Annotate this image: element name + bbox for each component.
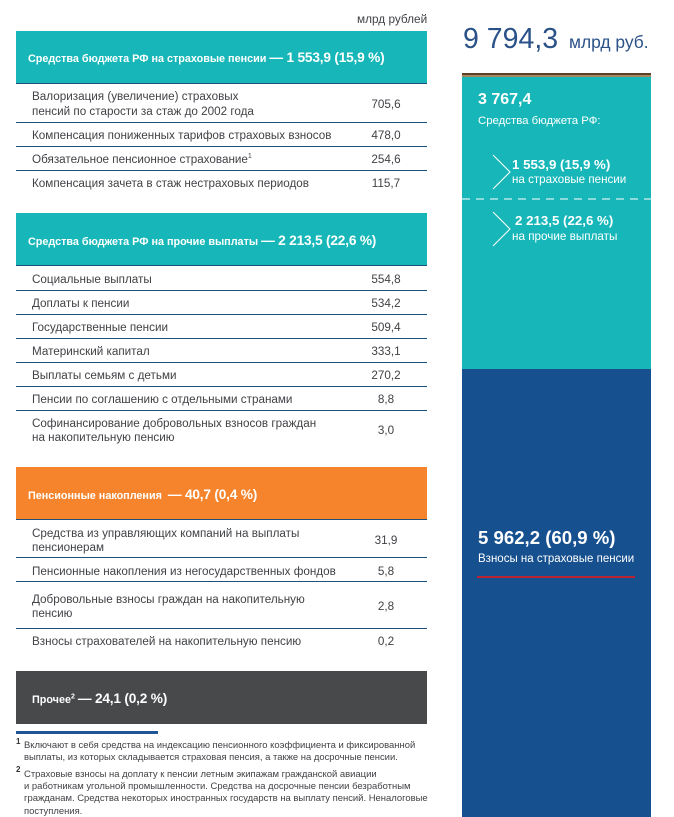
value: non-state funds: 5,8 [378,565,394,578]
row: reduced tariffs: Компенсация пониженных тарифов страховых взносов [32,129,331,142]
value: insurer contributions: 0,2 [378,635,394,648]
row: insurer contributions: Взносы страхователей на накопительную пенсию [32,635,301,648]
footnote 2 text: и работникам угольной промышленности. Средства на досрочные пенсии безработным [24,781,410,792]
stacked column [462,73,651,817]
row: valorization: Валоризация (увеличение) страховых [32,90,239,103]
value: pension supplements: 534,2 [371,297,401,310]
footnote 2 text: гражданам. Средства некоторых иностранных государств на выплату пенсий. Неналоговые [24,793,428,804]
row: family payments: Выплаты семьям с детьми [32,369,177,382]
value: reduced tariffs: 478,0 [371,129,401,142]
value: social payments: 554,8 [371,273,401,286]
other amount: 2 213,5 (22,6 %) [515,213,613,228]
segment: savings [462,75,651,77]
header text: other payments: Средства бюджета РФ на прочие выплаты — 2 213,5 (22,6 %) [28,233,376,248]
value: co-financing: 3,0 [378,424,394,437]
row: voluntary contributions: Добровольные взносы граждан на накопительную [32,593,305,606]
other label: на прочие выплаты [512,230,617,243]
value: state pensions: 509,4 [371,321,401,334]
row: agreements with countries: Пенсии по соглашению с отдельными странами [32,393,292,406]
contributions amount: 5 962,2 (60,9 %) [478,527,615,548]
row: voluntary contributions [32,593,305,620]
row: valorization [32,90,254,118]
row: pension supplements: Доплаты к пенсии [32,297,129,310]
icon: chevron other [492,212,511,246]
insurance label: на страховые пенсии [512,173,626,186]
value: maternity capital: 333,1 [371,345,401,358]
panel: other [16,671,427,724]
value: agreements with countries: 8,8 [378,393,394,406]
panel: pension savings [16,467,427,648]
header: insurance pensions [16,31,427,83]
footnote 2 text: поступления. [24,806,82,817]
value: non-insurance periods: 115,7 [372,177,400,190]
footnote 2 text [24,769,428,817]
row: voluntary contributions: пенсию [32,607,72,620]
header text: pension savings: Пенсионные накопления — 40,7 (0,4 %) [28,487,257,502]
row: state pensions: Государственные пенсии [32,321,168,334]
total: 9 794,3 млрд руб. [463,23,649,55]
budget label: Средства бюджета РФ: [478,115,601,127]
footnote 1 text [24,740,415,763]
row: non-insurance periods: Компенсация зачета в стаж нестраховых периодов [32,177,309,190]
row: management companies [32,527,299,554]
unit label: млрд рублей [357,12,427,26]
panel: budget funds for insurance pensions [16,31,427,190]
value: mandatory insurance: 254,6 [371,153,401,166]
header text: other: Прочее2 — 24,1 (0,2 %) [32,691,167,706]
row: management companies: пенсионерам [32,541,104,554]
panel: budget funds for other payments [16,213,427,444]
footnote 1 text: Включают в себя средства на индексацию пенсионного коэффициента и фиксированной [24,740,415,751]
row: maternity capital: Материнский капитал [32,345,150,358]
row: valorization: пенсий по старости за стаж до 2002 года [32,105,254,118]
red underline [477,576,635,578]
contributions label: Взносы на страховые пенсии [478,553,634,565]
segment: contributions [462,369,651,817]
value: valorization: 705,6 [371,98,401,111]
header: pension savings [16,467,427,519]
row: co-financing [32,417,316,444]
row: co-financing: на накопительную пенсию [32,431,175,444]
footnotes [16,737,428,817]
footnote 2 text: Страховые взносы на доплату к пенсии летным экипажам гражданской авиации [24,769,377,780]
segment: other [462,73,651,75]
row: management companies: Средства из управляющих компаний на выплаты [32,527,299,540]
insurance amount: 1 553,9 (15,9 %) [512,157,610,172]
icon: chevron insurance [492,154,511,190]
value: family payments: 270,2 [371,369,401,382]
header: other payments [16,213,427,265]
value: voluntary contributions: 2,8 [378,600,394,613]
footnote 2 number: 2 [16,765,20,774]
value: management companies: 31,9 [375,534,397,547]
footnote 1 text: выплаты, из которых складывается страховая пенсия, а также на досрочные пенсии. [24,752,398,763]
divider [462,198,651,200]
row: mandatory insurance: Обязательное пенсионное страхование1 [32,153,252,166]
budget amount: 3 767,4 [478,91,531,108]
row: co-financing: Софинансирование добровольных взносов граждан [32,417,316,430]
footnote 1 number: 1 [16,737,20,746]
row: non-state funds: Пенсионные накопления из негосударственных фондов [32,565,336,578]
header text: insurance pensions: Средства бюджета РФ на страховые пенсии — 1 553,9 (15,9 %) [28,50,384,65]
row: social payments: Социальные выплаты [32,273,152,286]
